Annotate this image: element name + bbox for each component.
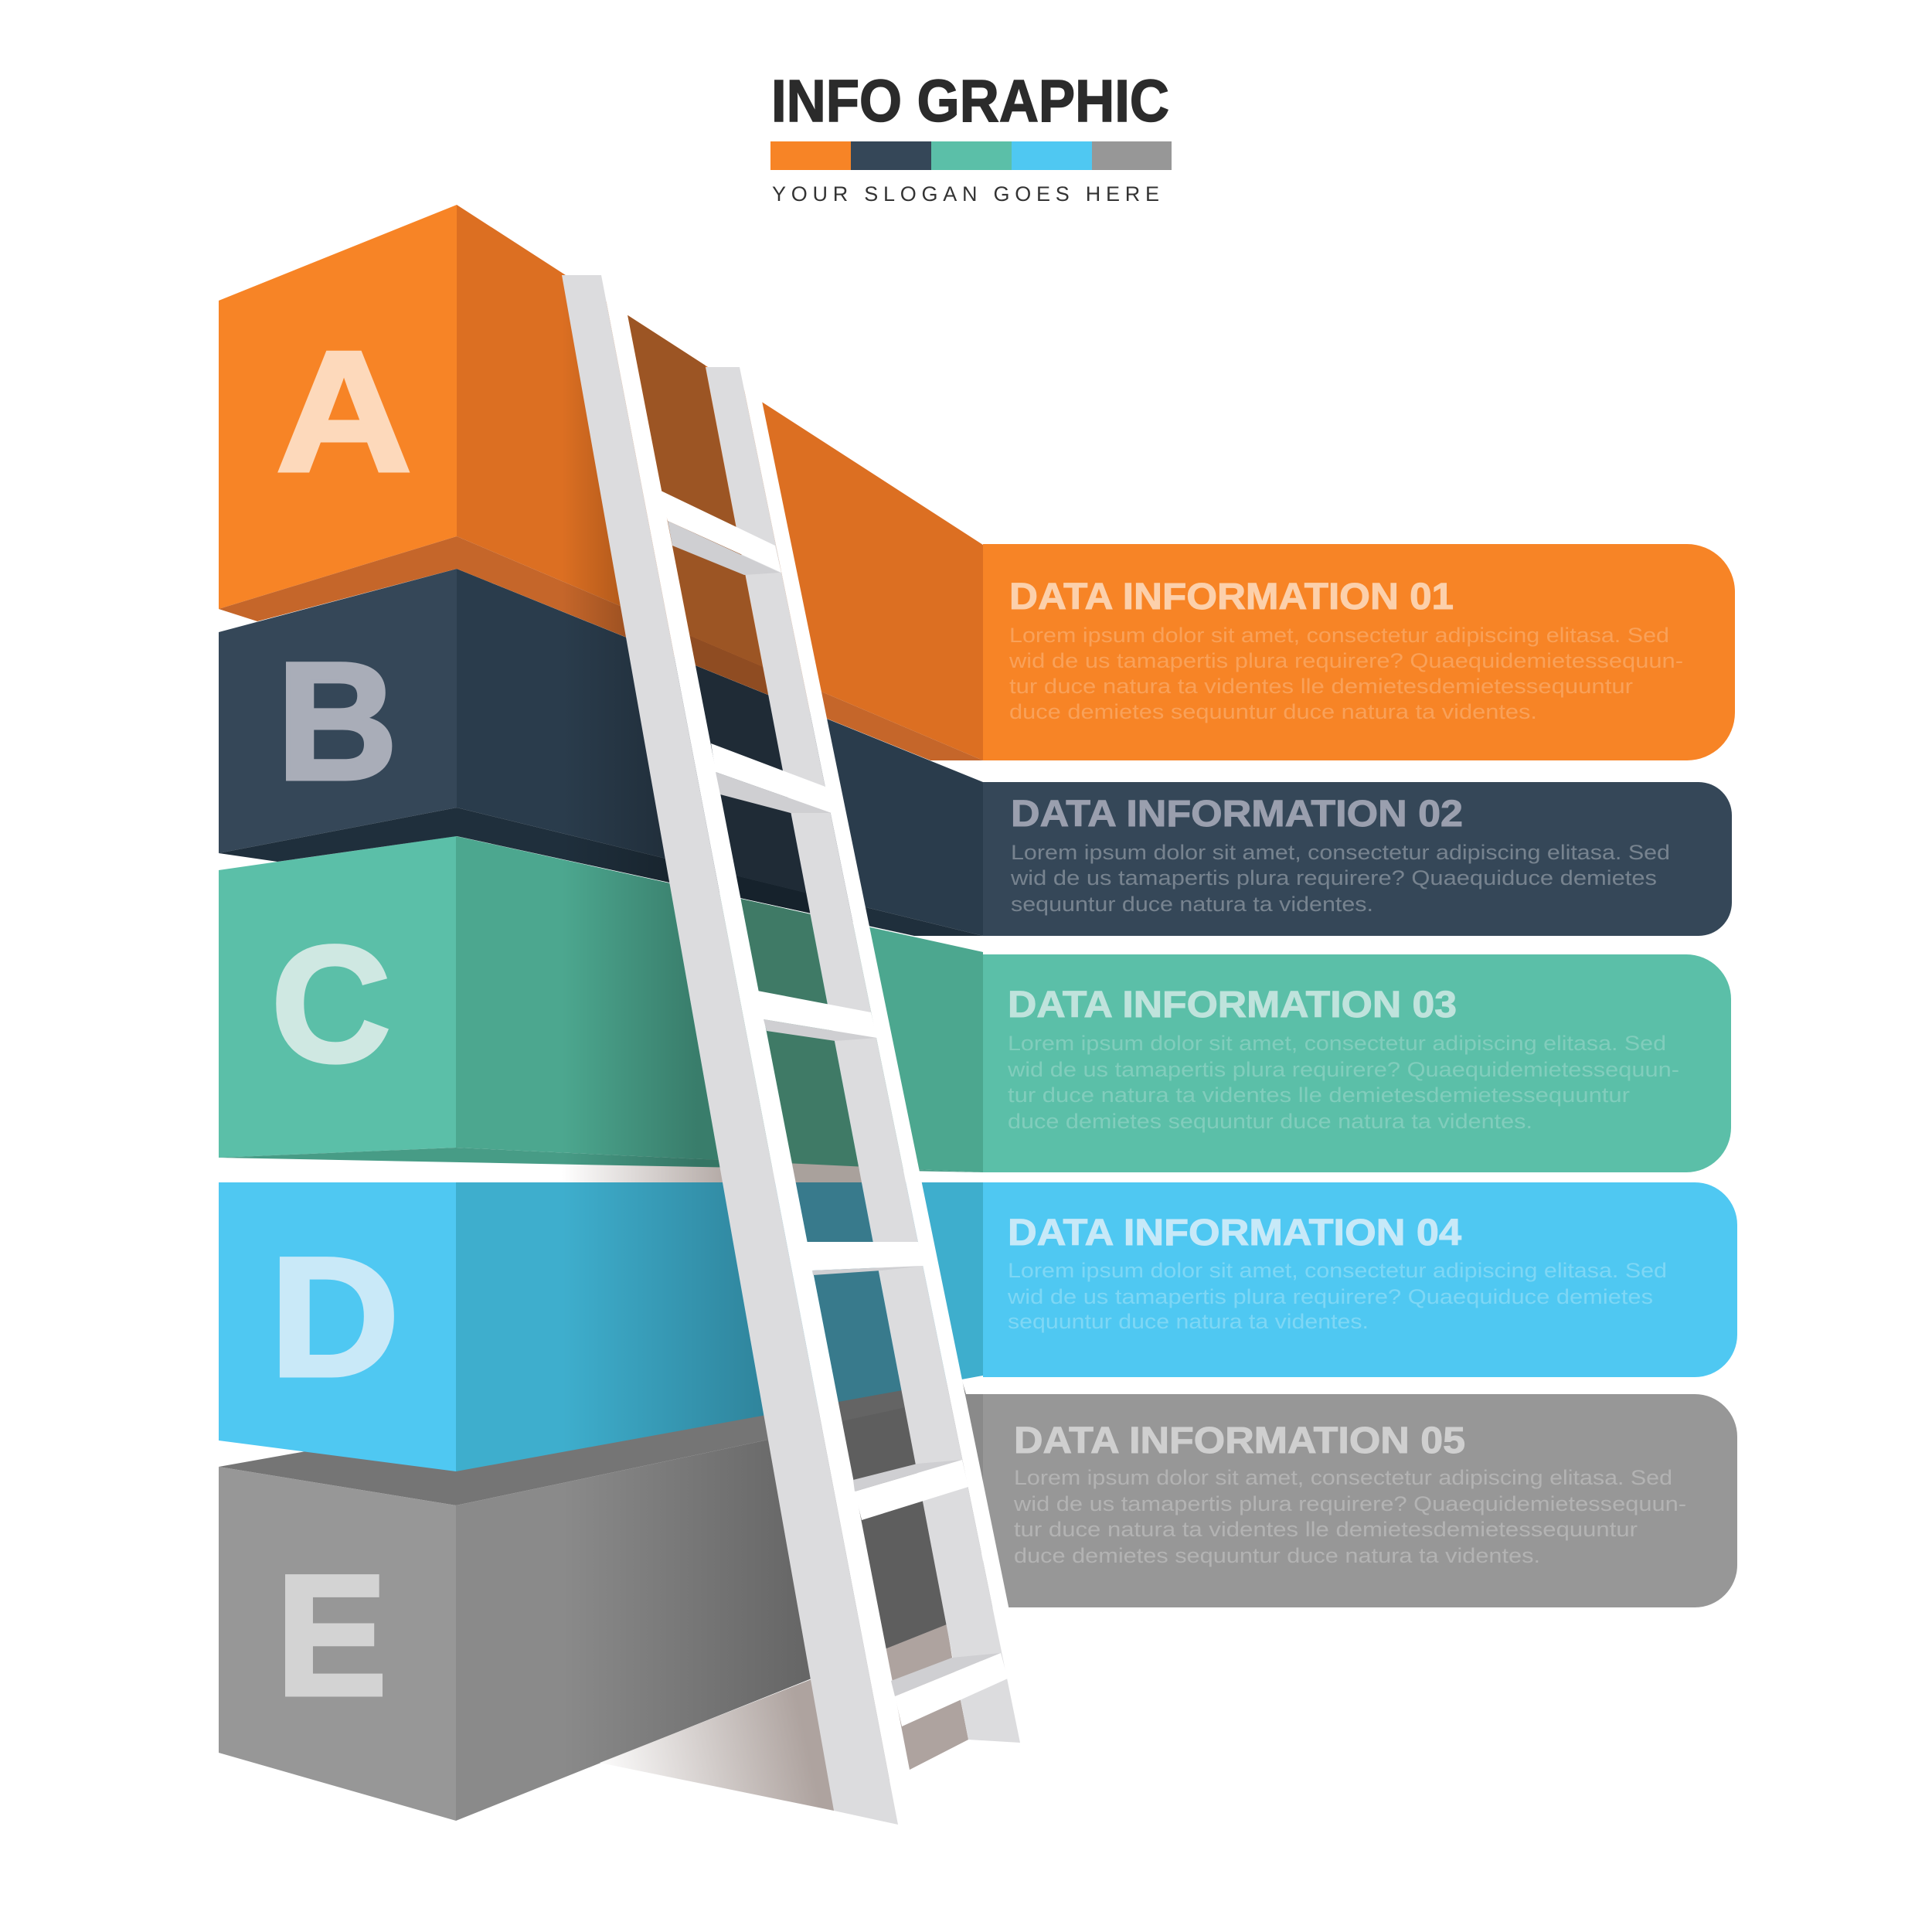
rung 3 [757,991,877,1041]
rung 5 [853,1460,968,1520]
letter C: C [271,912,391,1097]
floor shadow [600,1624,968,1811]
letter D: D [270,1222,400,1412]
rung 6 [891,1653,1008,1726]
infographic canvas [219,79,1737,1825]
box A: orange block [219,205,983,760]
heading 01: DATA INFORMATION 01 [1009,577,1454,617]
colour bar [770,141,1172,170]
heading 03: DATA INFORMATION 03 [1008,985,1457,1026]
panel: data information 01 [983,544,1735,760]
body 05: duce demietes sequuntur duce natura ta videntes. [1014,1544,1540,1567]
body 02: sequuntur duce natura ta videntes. [1011,893,1373,916]
body 04 [1007,1259,1667,1333]
rung 2 [711,743,832,813]
left rail [562,275,898,1825]
body 04: Lorem ipsum dolor sit amet, consectetur adipiscing elitasa. Sed [1008,1259,1667,1282]
text: data information 01 [1009,577,1683,723]
rung 4 [806,1242,923,1275]
body 01: duce demietes sequuntur duce natura ta videntes. [1009,700,1537,723]
text: data information 02 [1010,794,1670,916]
body 01: wid de us tamapertis plura requirere? Quaequidemietessequun- [1009,649,1683,672]
box E: grey block [219,1368,983,1821]
text: data information 04 [1007,1213,1667,1333]
right rail [706,367,1020,1743]
body 03: wid de us tamapertis plura requirere? Quaequidemietessequun- [1007,1058,1679,1081]
body 03 [1007,1032,1679,1133]
ladder shadow gradient on blocks [574,348,811,1763]
box D: blue block [219,1182,983,1471]
body 01: Lorem ipsum dolor sit amet, consectetur adipiscing elitasa. Sed [1009,624,1669,647]
body 02: wid de us tamapertis plura requirere? Quaequiduce demietes [1010,866,1657,889]
letter B: B [277,628,398,815]
heading 04: DATA INFORMATION 04 [1008,1213,1461,1253]
body 04: sequuntur duce natura ta videntes. [1008,1310,1369,1333]
body 02: Lorem ipsum dolor sit amet, consectetur adipiscing elitasa. Sed [1011,841,1670,864]
right rail white side [740,367,1036,1743]
darkened blocks seen between ladder rails [628,315,968,1770]
body 02 [1010,841,1670,916]
text: data information 03 [1007,985,1679,1133]
letter E: E [276,1539,387,1732]
box C: teal block [219,836,983,1172]
panel: data information 03 [983,954,1731,1172]
body 04: wid de us tamapertis plura requirere? Quaequiduce demietes [1007,1285,1653,1308]
rung 1 [658,489,781,575]
slogan: YOUR SLOGAN GOES HERE [772,182,1159,206]
body 05: wid de us tamapertis plura requirere? Quaequidemietessequun- [1013,1492,1686,1515]
shadow band between C and D [562,1159,871,1182]
body 03: Lorem ipsum dolor sit amet, consectetur adipiscing elitasa. Sed [1008,1032,1666,1055]
body 05: Lorem ipsum dolor sit amet, consectetur adipiscing elitasa. Sed [1014,1466,1672,1489]
body 01: tur duce natura ta videntes lle demietesdemietessequuntur [1009,675,1633,698]
body 01 [1009,624,1683,723]
block letters [270,316,412,1732]
ladder [562,275,1036,1825]
body 03: tur duce natura ta videntes lle demietesdemietessequuntur [1008,1083,1630,1107]
text: data information 05 [1013,1420,1686,1567]
panel: data information 04 [983,1182,1737,1377]
body 05: tur duce natura ta videntes lle demietesdemietessequuntur [1014,1518,1638,1541]
left rail white side [601,275,910,1825]
body 03: duce demietes sequuntur duce natura ta videntes. [1008,1110,1532,1133]
box B: navy block [219,569,983,936]
heading 02: DATA INFORMATION 02 [1011,794,1463,835]
letter A: A [276,316,412,508]
body 05 [1013,1466,1686,1567]
panel: data information 02 [983,782,1732,936]
title: INFO GRAPHIC [771,68,1169,134]
heading 05: DATA INFORMATION 05 [1014,1420,1465,1461]
title block [770,68,1172,206]
panel: data information 05 [983,1394,1737,1607]
